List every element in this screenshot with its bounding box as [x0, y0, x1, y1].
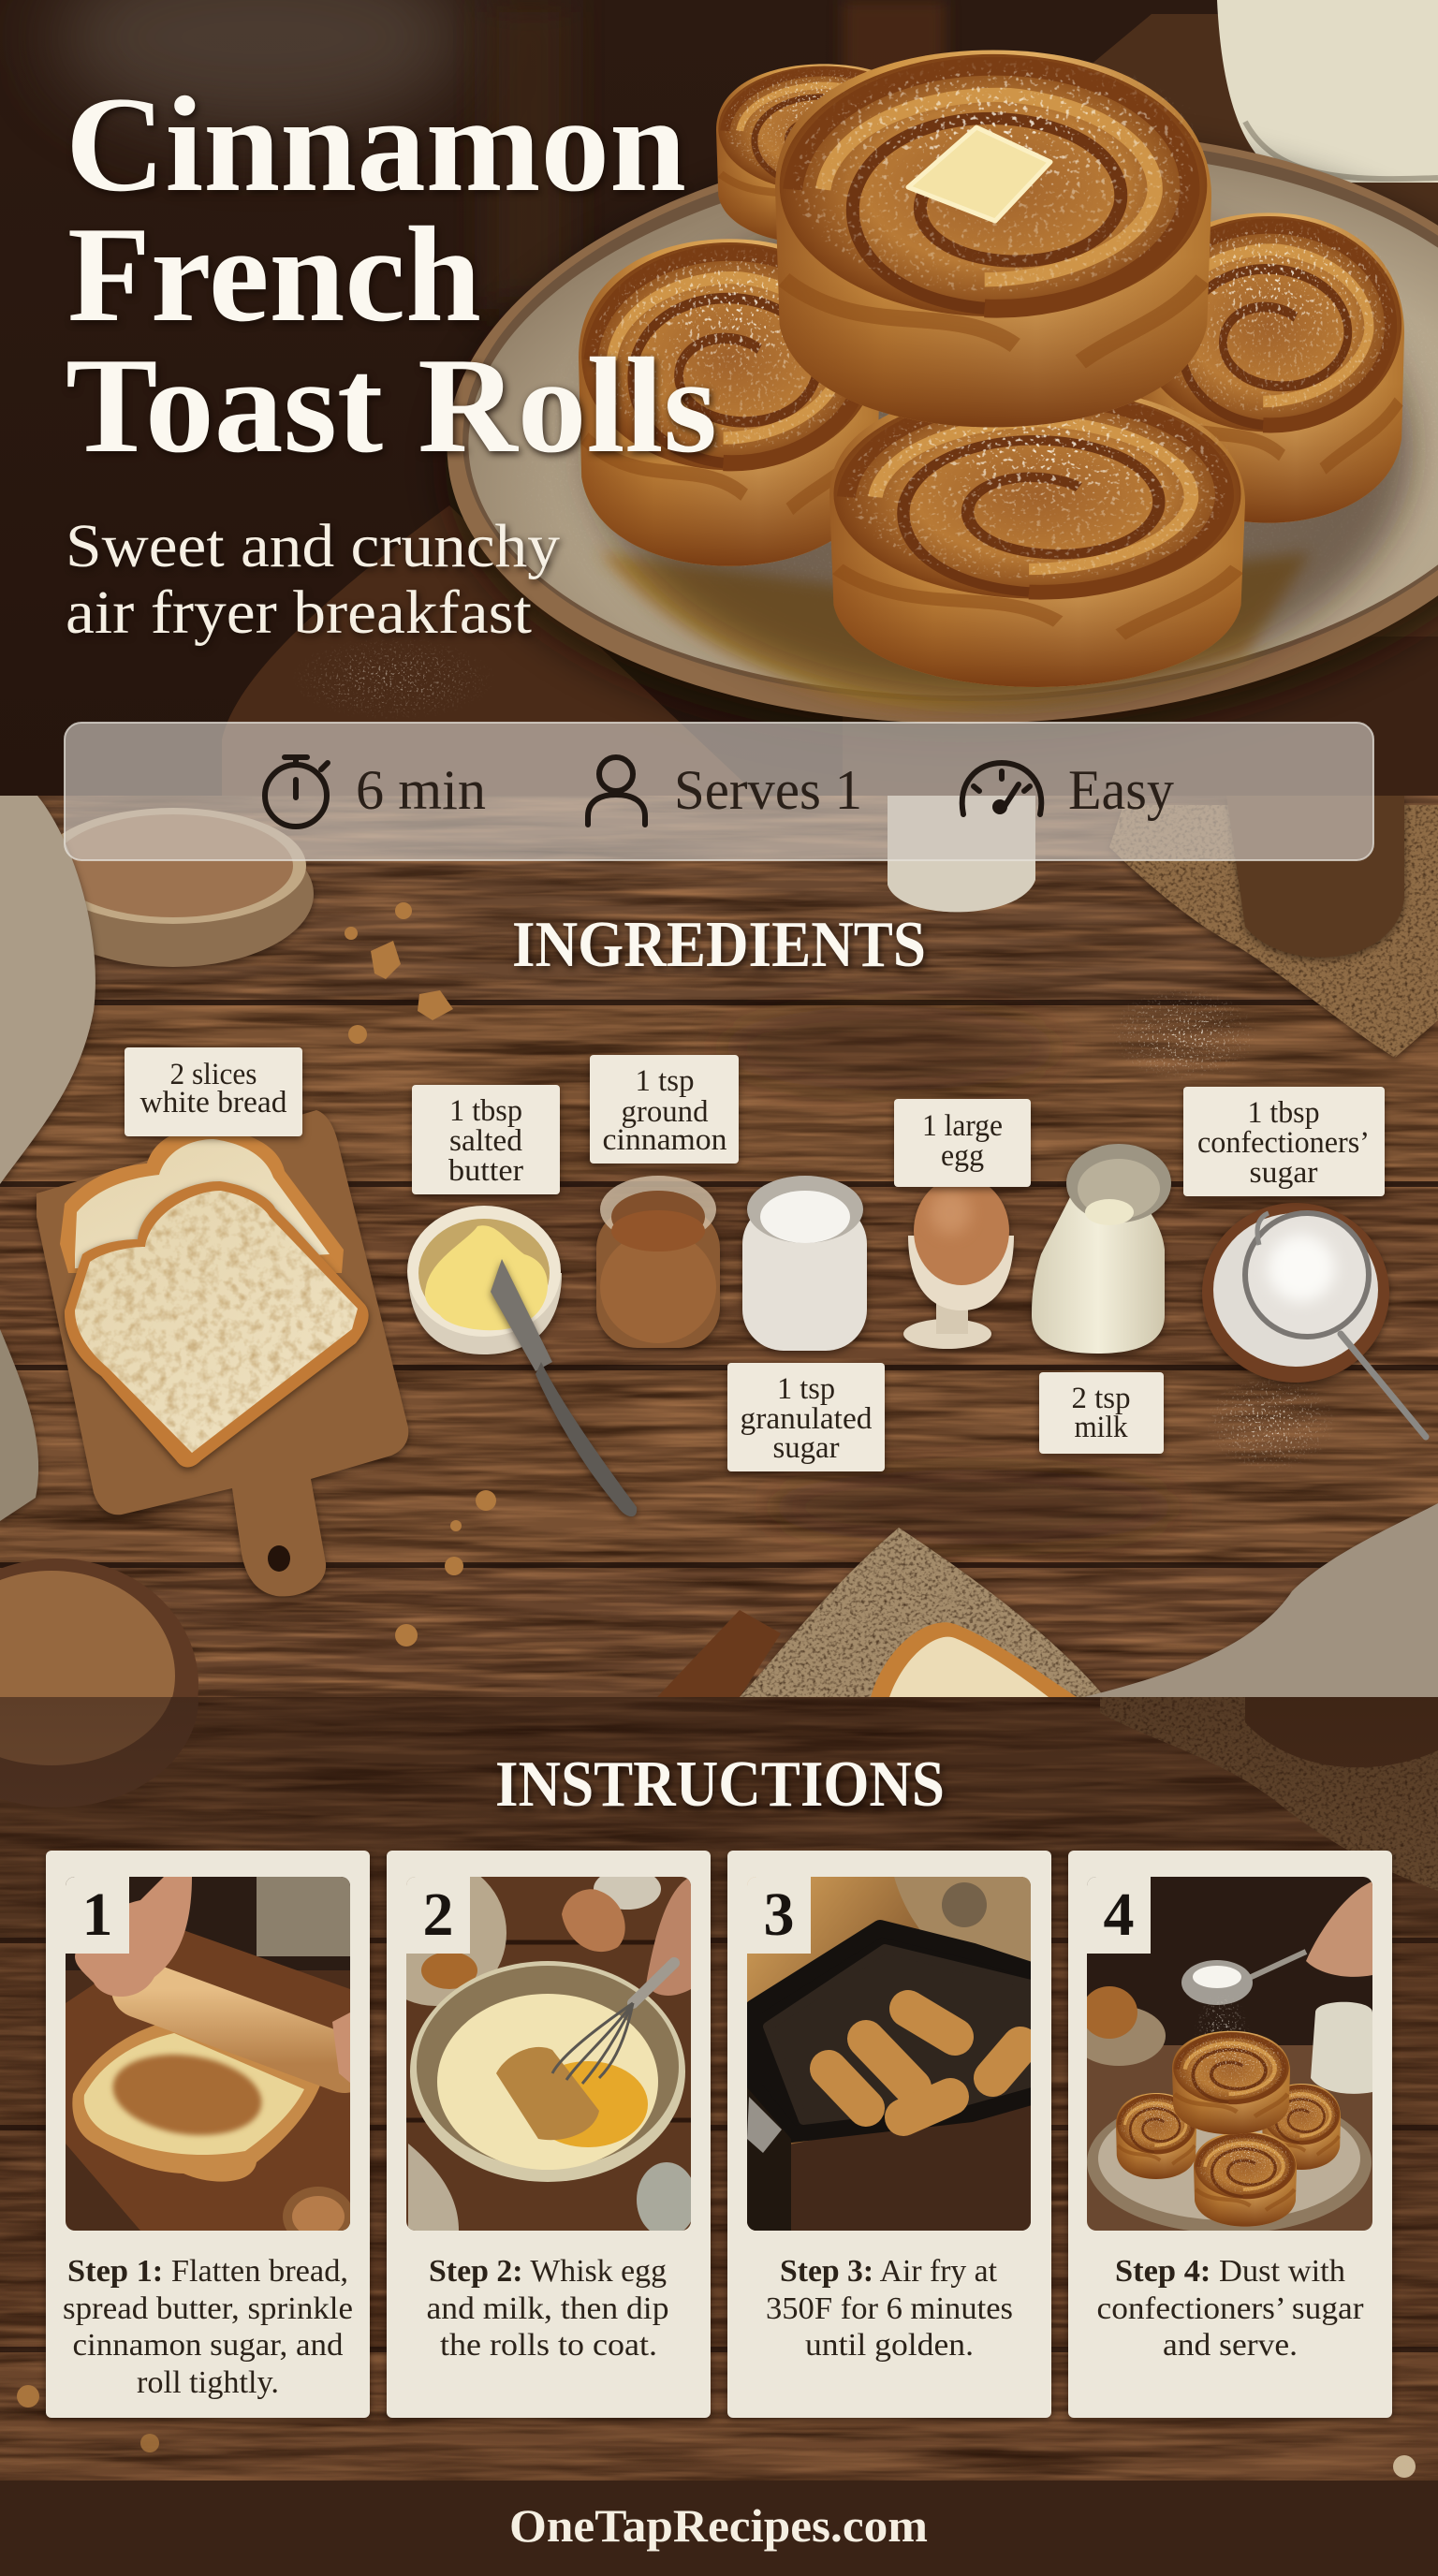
plate	[436, 139, 1438, 723]
roll: front	[829, 386, 1245, 687]
step 2 text: and milk, then dip	[427, 2291, 668, 2326]
hero section	[0, 0, 1438, 805]
icon: person	[588, 757, 645, 825]
label: salted butter: butter	[448, 1154, 523, 1188]
label: confectioners sugar	[1183, 1087, 1385, 1196]
step 2 image: whisking egg	[364, 1860, 697, 2237]
syrup pool	[599, 552, 1311, 708]
step 2 text	[427, 2254, 668, 2363]
background glow	[56, 0, 468, 131]
step 2 number badge: 2	[423, 1881, 453, 1949]
subtitle: Sweet and crunchy	[66, 512, 560, 580]
crumbs on board	[299, 640, 487, 717]
panel: step 1	[46, 1851, 370, 2418]
label: large egg	[894, 1099, 1031, 1187]
instructions heading: INSTRUCTIONS	[495, 1749, 945, 1821]
instructions wood background	[0, 1586, 1438, 2481]
step 4 number badge: 4	[1103, 1881, 1135, 1949]
panel: step 3	[727, 1851, 1051, 2418]
bread: back slice	[60, 1127, 344, 1273]
step 4 text	[1097, 2254, 1364, 2363]
decor: milk glass bottom	[888, 796, 1035, 912]
roll: left	[579, 239, 880, 566]
step 2 number badge	[406, 1877, 470, 1954]
decor: bottom left bowl	[0, 1559, 198, 1811]
decor: wood piece	[657, 1610, 781, 1697]
label: large egg: 1 large	[922, 1109, 1003, 1143]
decor: lower left cloth	[0, 1329, 38, 1521]
step 4 text: confectioners’ sugar	[1097, 2291, 1364, 2326]
crumbs	[345, 902, 496, 1647]
step 4 number badge	[1087, 1877, 1151, 1954]
title: French	[67, 198, 481, 350]
label: milk	[1039, 1372, 1164, 1454]
label: salted butter: salted	[449, 1124, 522, 1158]
title	[66, 68, 717, 481]
sugar jar	[742, 1176, 867, 1351]
milk glass	[1217, 0, 1438, 183]
decor: bread on burlap	[871, 1622, 1077, 1697]
powdered sugar bowl and sieve	[1202, 1203, 1426, 1437]
decor: burlap bottom	[740, 1528, 1105, 1697]
label: ground cinnamon: 1 tsp	[635, 1064, 695, 1098]
cutting board	[37, 1110, 408, 1596]
butter pat	[908, 127, 1050, 221]
label: confectioners sugar: 1 tbsp	[1247, 1096, 1320, 1130]
bread: front slice	[65, 1181, 369, 1468]
roll: back	[716, 64, 932, 245]
step 3 text: until golden.	[805, 2328, 974, 2363]
step 1 number badge	[66, 1877, 129, 1954]
cinnamon jar	[596, 1176, 720, 1348]
butter knife	[491, 1259, 637, 1516]
step 1 text: roll tightly.	[137, 2365, 279, 2400]
label: milk: milk	[1075, 1411, 1128, 1444]
stat: difficulty: Easy	[1068, 759, 1174, 821]
step 1 image: rolling bread	[66, 1877, 354, 2247]
label: granulated sugar	[727, 1363, 885, 1471]
footer band	[0, 2481, 1438, 2576]
roll: right	[1133, 212, 1404, 523]
step 3 text	[766, 2254, 1013, 2363]
label: granulated sugar: sugar	[773, 1431, 840, 1465]
step 3 text: Step 3: Air fry at	[780, 2254, 998, 2289]
label: ground cinnamon	[590, 1055, 739, 1164]
label: granulated sugar: 1 tsp	[777, 1372, 835, 1406]
step 4 text: Step 4: Dust with	[1115, 2254, 1345, 2289]
ingredients wood background	[0, 796, 1438, 1811]
step 4 text: and serve.	[1163, 2328, 1298, 2363]
decor: burlap top right	[1109, 805, 1438, 1058]
decor: cloth bottom right	[1084, 1503, 1438, 1697]
step 2 text: Step 2: Whisk egg	[429, 2254, 667, 2289]
label: milk: 2 tsp	[1071, 1382, 1131, 1415]
label: salted butter: 1 tbsp	[449, 1094, 522, 1128]
icon: gauge	[962, 763, 1041, 814]
step 3 image: air fryer	[747, 1877, 1031, 2231]
step 2 text: the rolls to coat.	[440, 2328, 657, 2363]
shadow under rolls	[590, 197, 1414, 702]
label: ground cinnamon: ground	[622, 1095, 709, 1129]
step 1 text: spread butter, sprinkle	[63, 2291, 353, 2326]
label: confectioners sugar: confectioners’	[1197, 1126, 1370, 1160]
ingredients heading: INGREDIENTS	[512, 909, 926, 981]
roll: top	[775, 51, 1211, 427]
label: large egg: egg	[941, 1139, 984, 1173]
stat: servings: Serves 1	[674, 759, 862, 821]
step 3 number badge: 3	[764, 1881, 794, 1949]
panel: step 4	[1068, 1851, 1392, 2418]
bread slices	[60, 1127, 369, 1468]
sugar dust	[1108, 988, 1336, 1471]
label: confectioners sugar: sugar	[1249, 1156, 1318, 1190]
step 3 number badge	[747, 1877, 811, 1954]
title: Toast Rolls	[66, 329, 717, 481]
step 4 image: dusting sugar	[1072, 1877, 1372, 2233]
decor: jar top right	[1226, 796, 1404, 958]
egg in cup	[903, 1177, 1014, 1349]
step 1 text: Step 1: Flatten bread,	[67, 2254, 348, 2289]
step 1 text	[63, 2254, 353, 2400]
step 3 text: 350F for 6 minutes	[766, 2291, 1013, 2326]
panel: step 2	[364, 1851, 711, 2418]
label: white bread: 2 slices	[170, 1058, 257, 1091]
subtitle	[66, 512, 560, 647]
decor: burlap top right	[1100, 1697, 1438, 1891]
crumbs	[17, 1882, 1416, 2478]
subtitle: air fryer breakfast	[66, 578, 532, 647]
title: Cinnamon	[66, 68, 686, 220]
step 4 rolls	[1116, 2093, 1196, 2179]
decor: top left bowl	[33, 808, 314, 967]
decor: bowl top left	[0, 1586, 198, 1808]
decor: left cloth	[0, 796, 95, 1184]
milk bottle	[1032, 1144, 1171, 1354]
label: ground cinnamon: cinnamon	[603, 1123, 726, 1157]
stat: time: 6 min	[356, 759, 486, 821]
step 1 text: cinnamon sugar, and	[73, 2328, 343, 2363]
label: salted butter	[412, 1085, 560, 1194]
icon: stopwatch	[265, 757, 328, 827]
footer text: OneTapRecipes.com	[509, 2499, 928, 2552]
butter bowl	[407, 1206, 562, 1354]
label: granulated sugar: granulated	[740, 1402, 873, 1436]
label: white bread	[125, 1047, 302, 1136]
step 1 number badge: 1	[82, 1881, 112, 1949]
wooden board	[222, 505, 768, 805]
label: white bread: white bread	[140, 1086, 287, 1120]
decor: bowl top right	[1245, 1697, 1438, 1767]
stats bar	[65, 723, 1373, 860]
